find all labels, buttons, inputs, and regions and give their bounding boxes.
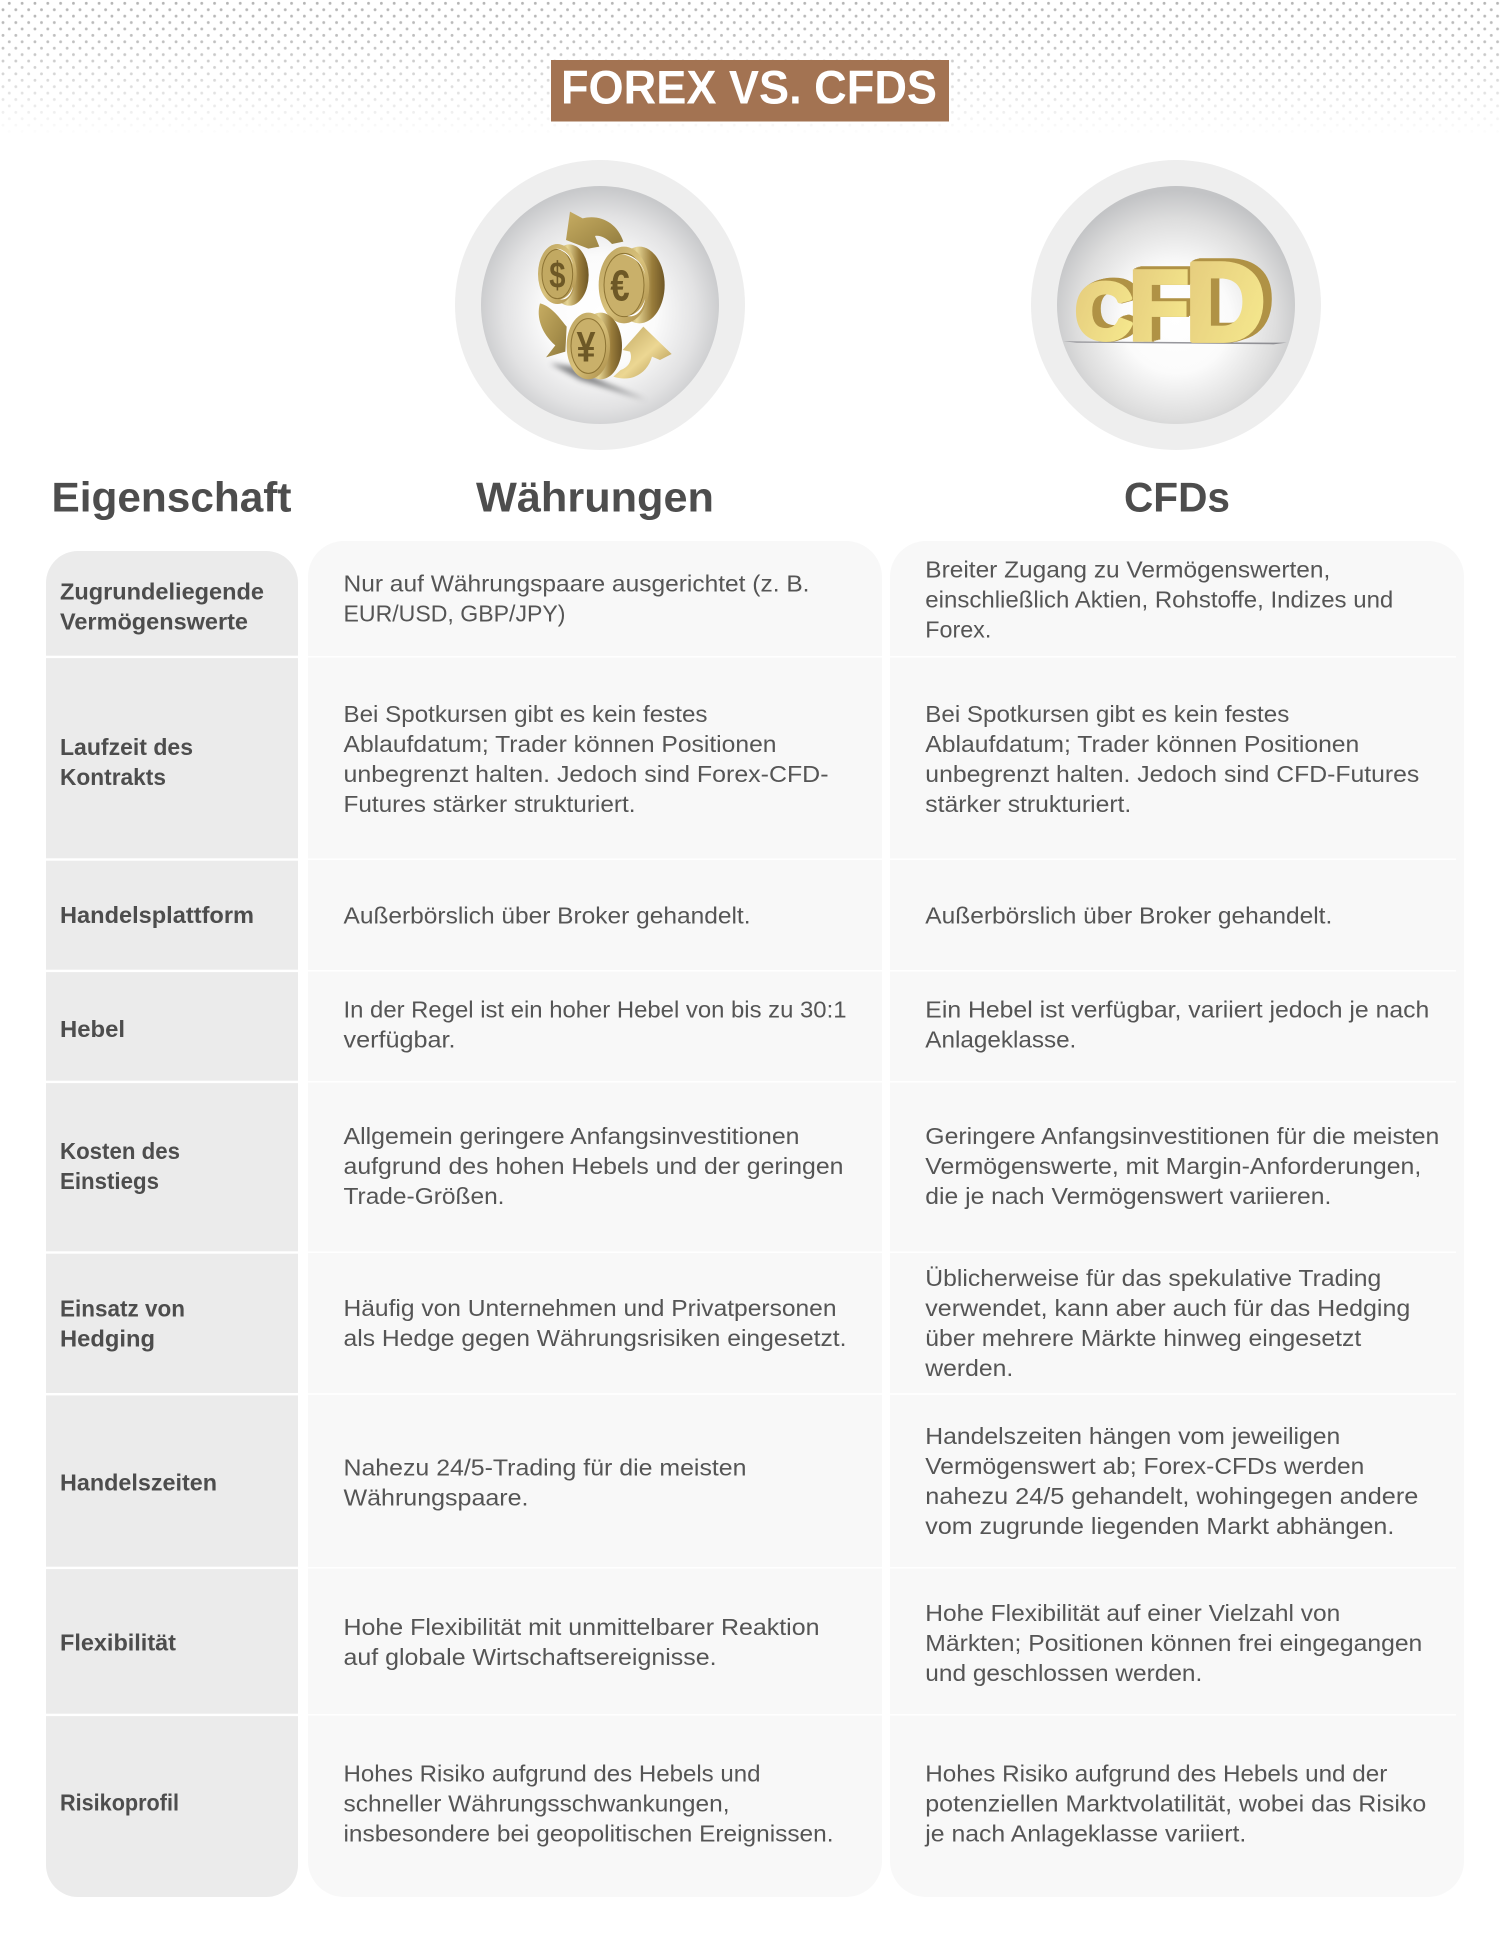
heading: CFDs: CFDs bbox=[1124, 474, 1230, 521]
text: Laufzeit Währungen: unbegrenzt halten. Jedoch sind Forex-CFD- bbox=[344, 761, 828, 787]
text: Basiswerte CFDs: Forex. bbox=[925, 617, 991, 643]
text: Flexibilität Währungen: Hohe Flexibilität mit unmittelbarer Reaktion bbox=[344, 1614, 820, 1640]
text: Flexibilität CFDs: Hohe Flexibilität auf einer Vielzahl von bbox=[925, 1600, 1340, 1626]
text: Laufzeit Währungen bbox=[344, 701, 828, 817]
text: Hedging Währungen: als Hedge gegen Währungsrisiken eingesetzt. bbox=[344, 1325, 846, 1351]
title: FOREX VS. CFDS bbox=[561, 60, 937, 114]
label: Handelszeiten: Handelszeiten bbox=[60, 1470, 217, 1496]
text: Basiswerte Währungen bbox=[344, 571, 810, 627]
text: Handelszeiten CFDs: Handelszeiten hängen vom jeweiligen bbox=[925, 1423, 1340, 1449]
text: Basiswerte CFDs: einschließlich Aktien, Rohstoffe, Indizes und bbox=[925, 587, 1393, 613]
text: Flexibilität CFDs bbox=[925, 1600, 1422, 1686]
text: Handelsplattform Währungen: Außerbörslich über Broker gehandelt. bbox=[344, 902, 750, 928]
text: Laufzeit CFDs: Ablaufdatum; Trader können Positionen bbox=[925, 731, 1359, 757]
text: Laufzeit CFDs: unbegrenzt halten. Jedoch sind CFD-Futures bbox=[925, 761, 1419, 787]
text: Flexibilität CFDs: und geschlossen werden. bbox=[925, 1660, 1202, 1686]
icon: CFD gold letters: C bbox=[1075, 267, 1133, 356]
text: Kosten CFDs: Vermögenswerte, mit Margin-Anforderungen, bbox=[925, 1153, 1421, 1179]
label: Kosten des Einstiegs: Kosten des bbox=[60, 1138, 180, 1164]
panel: Eigenschaft column bbox=[46, 551, 298, 1897]
text: Handelszeiten CFDs bbox=[925, 1423, 1418, 1539]
text: Hebel Währungen bbox=[344, 996, 846, 1052]
text: Handelszeiten Währungen bbox=[344, 1454, 746, 1510]
panel: CFDs column bbox=[890, 541, 1464, 1897]
label: Kosten des Einstiegs: Einstiegs bbox=[60, 1168, 159, 1194]
text: Risikoprofil Währungen: schneller Währungsschwankungen, bbox=[344, 1791, 730, 1817]
text: Hedging CFDs: über mehrere Märkte hinweg eingesetzt bbox=[925, 1325, 1362, 1351]
text: Risikoprofil CFDs: Hohes Risiko aufgrund des Hebels und der bbox=[925, 1761, 1388, 1787]
text: Hedging CFDs: verwendet, kann aber auch für das Hedging bbox=[925, 1295, 1410, 1321]
icon: CFD gold letters: F bbox=[1129, 251, 1189, 361]
text: Risikoprofil CFDs: potenziellen Marktvolatilität, wobei das Risiko bbox=[925, 1791, 1426, 1817]
text: Hebel CFDs: Anlageklasse. bbox=[925, 1026, 1076, 1052]
label: Einsatz von Hedging: Hedging bbox=[60, 1326, 155, 1352]
text: Risikoprofil CFDs bbox=[924, 1761, 1426, 1847]
label: Flexibilität: Flexibilität bbox=[60, 1630, 176, 1656]
text: Risikoprofil CFDs: je nach Anlageklasse variiert. bbox=[924, 1821, 1246, 1847]
text: Kosten Währungen: aufgrund des hohen Hebels und der geringen bbox=[344, 1153, 844, 1179]
icon: currency coins: $ bbox=[549, 255, 566, 296]
label: Laufzeit des Kontrakts: Laufzeit des bbox=[60, 734, 193, 760]
text: Laufzeit Währungen: Futures stärker strukturiert. bbox=[344, 791, 636, 817]
text: Handelszeiten CFDs: vom zugrunde liegenden Markt abhängen. bbox=[925, 1513, 1394, 1539]
label: Kosten des Einstiegs bbox=[60, 1138, 180, 1194]
text: Hebel CFDs: Ein Hebel ist verfügbar, variiert jedoch je nach bbox=[925, 996, 1429, 1022]
text: Laufzeit CFDs: Bei Spotkursen gibt es kein festes bbox=[925, 701, 1289, 727]
text: Basiswerte CFDs: Breiter Zugang zu Vermögenswerten, bbox=[925, 557, 1330, 583]
text: Basiswerte Währungen: Nur auf Währungspaare ausgerichtet (z. B. bbox=[344, 571, 810, 597]
text: Risikoprofil Währungen: insbesondere bei geopolitischen Ereignissen. bbox=[344, 1821, 834, 1847]
label: Zugrundeliegende Vermögenswerte: Vermögenswerte bbox=[60, 608, 248, 634]
text: Laufzeit CFDs bbox=[925, 701, 1419, 817]
text: Kosten Währungen: Allgemein geringere Anfangsinvestitionen bbox=[344, 1123, 800, 1149]
label: Zugrundeliegende Vermögenswerte: Zugrundeliegende bbox=[60, 578, 264, 604]
text: Handelszeiten Währungen: Nahezu 24/5-Trading für die meisten bbox=[344, 1454, 746, 1480]
text: Risikoprofil Währungen: Hohes Risiko aufgrund des Hebels und bbox=[344, 1761, 760, 1787]
icon: CFD gold letters bbox=[1031, 160, 1321, 450]
heading: Eigenschaft: Eigenschaft bbox=[52, 474, 292, 521]
text: Hebel Währungen: In der Regel ist ein hoher Hebel von bis zu 30:1 bbox=[344, 996, 846, 1022]
label: Laufzeit des Kontrakts bbox=[60, 734, 193, 790]
text: Laufzeit Währungen: Bei Spotkursen gibt es kein festes bbox=[344, 701, 708, 727]
icon: currency coins: € bbox=[610, 262, 630, 311]
text: Flexibilität Währungen: auf globale Wirtschaftsereignisse. bbox=[344, 1644, 716, 1670]
text: Hedging CFDs: werden. bbox=[924, 1355, 1013, 1381]
text: Handelsplattform CFDs: Außerbörslich über Broker gehandelt. bbox=[925, 902, 1332, 928]
text: Basiswerte CFDs bbox=[925, 557, 1393, 643]
text: Hedging Währungen: Häufig von Unternehmen und Privatpersonen bbox=[344, 1295, 836, 1321]
text: Laufzeit Währungen: Ablaufdatum; Trader können Positionen bbox=[344, 731, 776, 757]
text: Hedging Währungen bbox=[344, 1295, 846, 1351]
text: Basiswerte Währungen: EUR/USD, GBP/JPY) bbox=[344, 601, 566, 627]
label: Hebel: Hebel bbox=[60, 1016, 125, 1042]
label: Einsatz von Hedging bbox=[60, 1296, 185, 1352]
text: Handelszeiten Währungen: Währungspaare. bbox=[344, 1484, 528, 1510]
icon: currency coins bbox=[455, 160, 745, 450]
text: Kosten CFDs: Geringere Anfangsinvestitionen für die meisten bbox=[925, 1123, 1439, 1149]
text: Hebel CFDs bbox=[925, 996, 1429, 1052]
icon: CFD gold letters: D bbox=[1185, 240, 1266, 365]
label: Risikoprofil: Risikoprofil bbox=[60, 1790, 179, 1816]
icon: currency coins: ¥ bbox=[577, 324, 596, 371]
text: Hebel Währungen: verfügbar. bbox=[344, 1026, 456, 1052]
text: Laufzeit CFDs: stärker strukturiert. bbox=[925, 791, 1131, 817]
text: Handelszeiten CFDs: Vermögenswert ab; Forex-CFDs werden bbox=[925, 1453, 1364, 1479]
panel: Währungen column bbox=[308, 541, 882, 1897]
text: Hedging CFDs bbox=[924, 1265, 1410, 1381]
text: Hedging CFDs: Üblicherweise für das spekulative Trading bbox=[925, 1265, 1381, 1291]
heading: Währungen: Währungen bbox=[476, 474, 714, 521]
label: Laufzeit des Kontrakts: Kontrakts bbox=[60, 764, 166, 790]
text: Kosten Währungen bbox=[344, 1123, 844, 1209]
text: Flexibilität Währungen bbox=[344, 1614, 820, 1670]
label: Einsatz von Hedging: Einsatz von bbox=[60, 1296, 185, 1322]
text: Kosten Währungen: Trade-Größen. bbox=[344, 1183, 504, 1209]
text: Risikoprofil Währungen bbox=[344, 1761, 834, 1847]
text: Kosten CFDs bbox=[925, 1123, 1439, 1209]
text: Kosten CFDs: die je nach Vermögenswert variieren. bbox=[925, 1183, 1331, 1209]
text: Handelszeiten CFDs: nahezu 24/5 gehandelt, wohingegen andere bbox=[925, 1483, 1418, 1509]
label: Zugrundeliegende Vermögenswerte bbox=[60, 578, 264, 634]
label: Handelsplattform: Handelsplattform bbox=[60, 902, 254, 928]
text: Flexibilität CFDs: Märkten; Positionen können frei eingegangen bbox=[925, 1630, 1422, 1656]
